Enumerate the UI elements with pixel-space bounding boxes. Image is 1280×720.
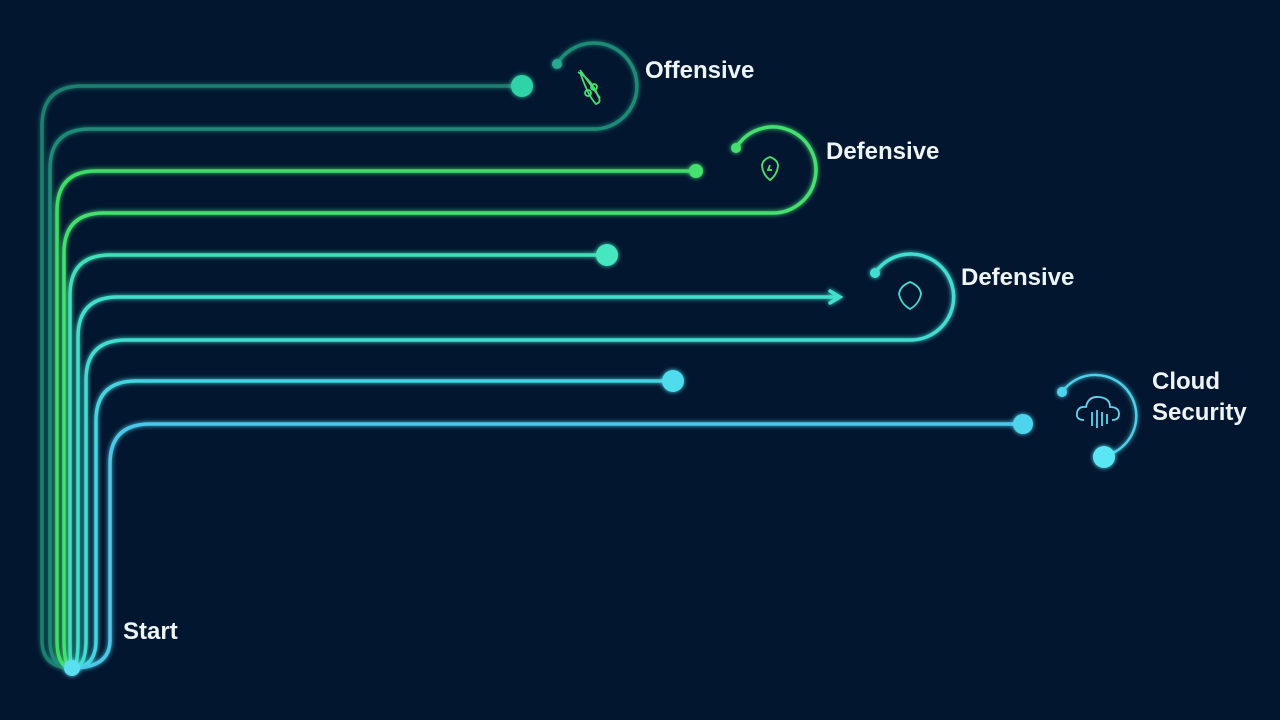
path 7: defensive loop 2 xyxy=(72,254,954,668)
path 5 xyxy=(70,255,607,668)
path 6 arrow xyxy=(72,291,840,668)
path 1: offensive xyxy=(42,86,522,668)
path 8 xyxy=(72,381,673,668)
label: Defensive 1: Defensive xyxy=(826,138,939,165)
path diagram xyxy=(42,43,1136,668)
path 9: cloud xyxy=(72,424,1023,668)
path 2: offensive loop xyxy=(50,43,637,668)
label: Start: Start xyxy=(123,618,178,645)
icon: sword xyxy=(578,70,600,104)
cloud arc xyxy=(1062,375,1136,456)
icon: shield 2 xyxy=(899,282,921,309)
label: Defensive 2: Defensive xyxy=(961,264,1074,291)
label: Cloud Security: Cloud xyxy=(1152,368,1220,395)
path 4: defensive loop xyxy=(64,127,816,668)
icon: cloud xyxy=(1077,397,1119,428)
dots xyxy=(64,59,1115,676)
path 3: defensive xyxy=(57,171,696,668)
label: Cloud Security: Security xyxy=(1152,399,1247,426)
label: Offensive: Offensive xyxy=(645,57,754,84)
icon: shield 1 xyxy=(762,157,778,180)
